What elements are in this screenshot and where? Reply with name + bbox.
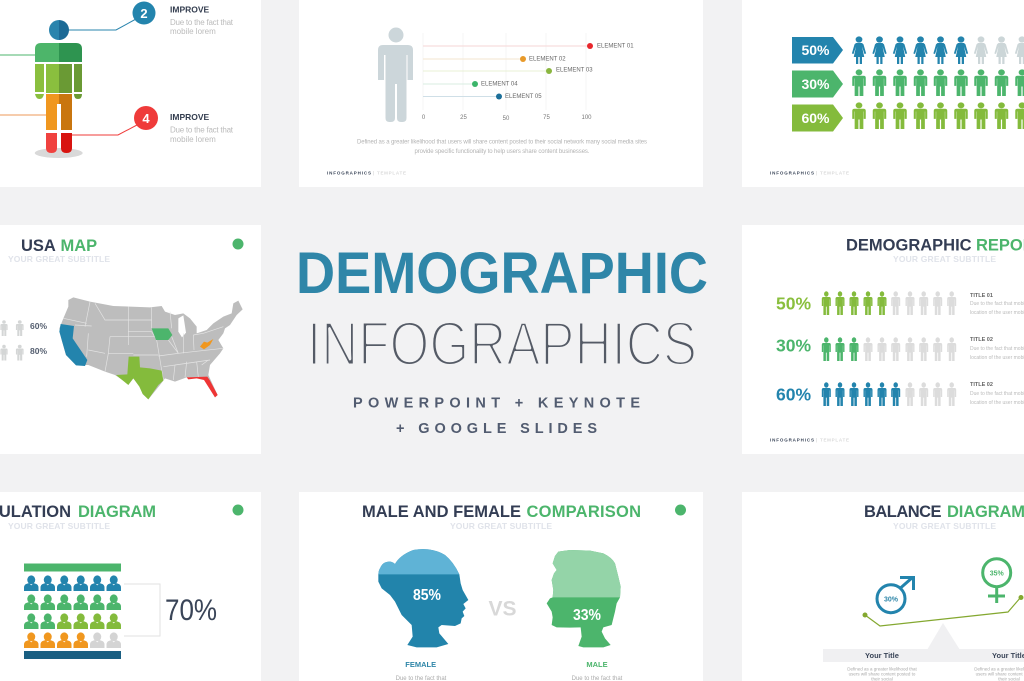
label: female	[396, 660, 447, 681]
footer label: INFOGRAPHICS	[770, 170, 814, 176]
legend: people with percentages: 60%	[30, 321, 47, 331]
badge	[675, 504, 686, 516]
heading: USA MAP: MAP	[60, 237, 97, 255]
heading: population diagram	[0, 503, 156, 521]
icon: segmented human figure	[35, 20, 83, 158]
callout text: improve bottom	[170, 112, 234, 144]
panel: balance diagram	[742, 492, 1024, 681]
tagline	[353, 396, 640, 437]
label: male: MALE	[586, 660, 608, 669]
text block: left title: Defined as a greater likelihood that	[847, 666, 918, 672]
footer label	[770, 438, 849, 442]
heading: balance diagram: DIAGRAM	[947, 503, 1024, 521]
callout: number 2: 2	[140, 6, 148, 21]
footer label: | TEMPLATE	[373, 170, 406, 176]
badge	[232, 238, 244, 250]
main title: DEMOGRAPHIC	[296, 241, 708, 306]
tagline: + GOOGLE SLIDES	[396, 421, 597, 437]
lollipop chart: 50	[503, 116, 510, 122]
balance beam	[862, 595, 1024, 626]
heading: demographic report: DEMOGRAPHIC	[846, 236, 972, 254]
text block: right title	[974, 651, 1024, 681]
label: VS: VS	[488, 598, 517, 620]
icon: male symbol 30%: 30%	[884, 596, 899, 604]
callout text: improve top	[170, 4, 234, 36]
callout text: improve bottom: IMPROVE	[170, 112, 210, 122]
heading: population diagram: DIAGRAM	[78, 503, 156, 521]
heading: comparison: COMPARISON	[526, 503, 641, 521]
tagline: POWERPOINT + KEYNOTE	[353, 396, 640, 412]
panel: USA map	[0, 225, 261, 454]
description text: provide specific functionality to help users share content businesses.	[414, 149, 590, 155]
bracket	[124, 584, 160, 636]
subtitle: YOUR GREAT SUBTITLE	[893, 521, 996, 531]
row: 60%	[776, 382, 1024, 406]
panel: male and female comparison	[299, 492, 703, 681]
icon: male symbol 30%	[877, 577, 914, 613]
footer label: INFOGRAPHICS	[327, 170, 371, 176]
subtitle: YOUR GREAT SUBTITLE	[8, 521, 110, 531]
tag: 50%: 50%	[801, 42, 830, 58]
main title	[296, 241, 708, 379]
description text	[357, 140, 647, 155]
label: female: FEMALE	[405, 660, 436, 669]
row: 50%: TITLE 01	[970, 293, 993, 299]
icon: female head: 85%	[413, 587, 441, 604]
icon: female symbol 35%	[983, 559, 1011, 603]
callout: number 2	[132, 2, 156, 24]
lollipop chart: 0	[422, 115, 426, 121]
legend: people with percentages	[0, 320, 47, 360]
callout text: improve top: Due to the fact that	[170, 18, 234, 27]
callout: number 4	[134, 106, 158, 130]
panel: percentage people rows	[742, 0, 1024, 187]
text block: left title	[847, 651, 918, 681]
heading: USA MAP	[21, 237, 97, 255]
value: 70%: 70%	[165, 594, 217, 627]
lollipop chart: 100	[581, 115, 592, 121]
icon: male head: 33%	[573, 607, 601, 624]
subtitle: YOUR GREAT SUBTITLE	[8, 254, 110, 264]
icon: female symbol 35%: 35%	[990, 570, 1004, 578]
footer label	[770, 170, 849, 176]
row: women 50%	[852, 36, 1024, 64]
callout text: improve top: IMPROVE	[170, 4, 210, 14]
row: 50%: 50%	[776, 294, 811, 314]
callout text: improve bottom: mobile lorem	[170, 135, 216, 144]
heading: balance diagram	[864, 503, 1024, 521]
footer label	[327, 170, 406, 176]
row: 30%: TITLE 02	[970, 337, 993, 343]
row: 50%	[776, 291, 1024, 316]
heading: balance diagram: BALANCE	[864, 503, 942, 521]
description text: Defined as a greater likelihood that users will share content posted to their social network many social media sites	[357, 140, 647, 146]
lollipop chart: ELEMENT 03	[556, 68, 593, 74]
icon: male head	[547, 550, 621, 647]
tag: 30%: 30%	[801, 76, 830, 92]
lollipop chart: 25	[460, 115, 467, 121]
callout text: improve bottom: Due to the fact that	[170, 126, 234, 134]
row: men 30%	[852, 69, 1024, 96]
icon: grey person	[378, 28, 413, 122]
lollipop chart	[422, 33, 634, 122]
icon: female head	[378, 549, 468, 647]
text block: left title: users will share content posted to	[849, 672, 916, 676]
lollipop chart: 75	[543, 115, 550, 121]
subtitle: YOUR GREAT SUBTITLE	[893, 254, 996, 264]
tag: 30%	[792, 70, 843, 98]
tag: 50%	[792, 37, 843, 64]
callout text: improve top: mobile lorem	[170, 27, 216, 36]
tag: 60%	[792, 104, 843, 132]
fulcrum and base	[823, 623, 1024, 662]
panel: body diagram	[0, 0, 261, 187]
lollipop chart: ELEMENT 04	[481, 82, 518, 88]
people grid	[24, 564, 121, 659]
main title: INFOGRAPHICS	[307, 310, 697, 379]
lollipop chart: ELEMENT 05	[505, 94, 542, 100]
map: United States	[59, 297, 243, 399]
lollipop chart: ELEMENT 01	[597, 44, 634, 50]
row: 60%: TITLE 02	[970, 382, 993, 388]
subtitle: YOUR GREAT SUBTITLE	[450, 521, 552, 531]
badge	[232, 504, 244, 516]
heading: comparison: MALE AND FEMALE	[362, 503, 521, 521]
panel: demographic report	[742, 225, 1024, 454]
footer label: INFOGRAPHICS	[770, 438, 814, 442]
panel: population diagram	[0, 492, 261, 681]
footer label: | TEMPLATE	[816, 170, 849, 176]
panel: element chart	[299, 0, 703, 187]
callout: number 4: 4	[142, 111, 150, 126]
heading: comparison	[362, 503, 641, 521]
row: men 60%	[852, 102, 1024, 129]
tag: 60%: 60%	[801, 110, 830, 126]
text block: left title: Your Title	[865, 651, 899, 660]
row: 60%: 60%	[776, 384, 811, 404]
legend: people with percentages: 80%	[30, 346, 47, 356]
connector lines	[0, 19, 137, 135]
row: 30%	[776, 336, 1024, 361]
label: male	[572, 660, 623, 681]
footer label: | TEMPLATE	[816, 438, 849, 442]
lollipop chart: ELEMENT 02	[529, 56, 566, 62]
heading: USA MAP: USA	[21, 237, 56, 255]
row: 30%: 30%	[776, 336, 811, 356]
